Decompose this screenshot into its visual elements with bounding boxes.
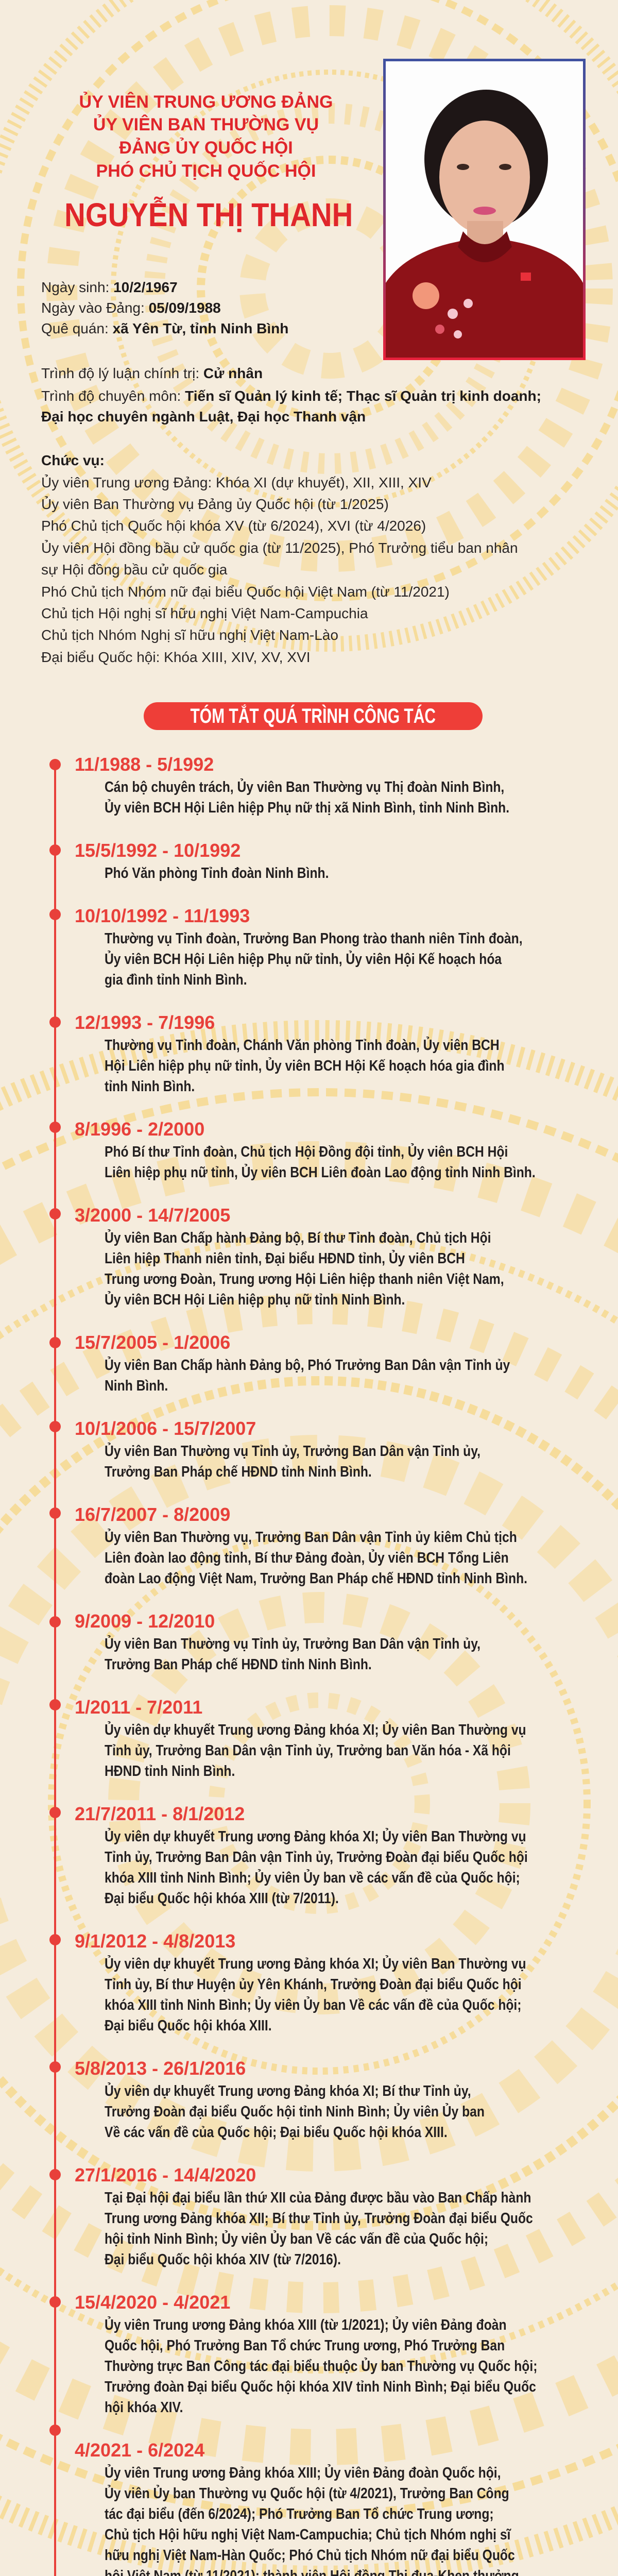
entry: 1/2011 - 7/2011: HĐND tỉnh Ninh Bình. bbox=[105, 1763, 235, 1780]
entry: 15/4/2020 - 4/2021: Quốc hội, Phó Trưởng Ban Tổ chức Trung ương, Phó Trưởng Ban bbox=[105, 2337, 505, 2354]
entry: 4/2021 - 6/2024: Chủ tịch Hội hữu nghị Việt Nam-Campuchia; Chủ tịch Nhóm nghị sĩ bbox=[105, 2527, 510, 2543]
entry: 15/7/2005 - 1/2006: 15/7/2005 - 1/2006 bbox=[75, 1332, 230, 1353]
entry: 15/4/2020 - 4/2021: Ủy viên Trung ương Đảng khóa XIII (từ 1/2021); Ủy viên Đảng đoàn bbox=[105, 2317, 507, 2333]
entry: 10/1/2006 - 15/7/2007: Ủy viên Ban Thường vụ Tỉnh ủy, Trưởng Ban Dân vận Tỉnh ủy, bbox=[105, 1443, 480, 1460]
entry: 3/2000 - 14/7/2005: Ủy viên BCH Hội Liên hiệp phụ nữ tỉnh Ninh Bình. bbox=[105, 1292, 405, 1308]
title: positions: ỦY VIÊN TRUNG ƯƠNG ĐẢNG bbox=[79, 92, 333, 112]
entry: 15/4/2020 - 4/2021 bbox=[75, 2292, 537, 2416]
entry: 10/10/1992 - 11/1993: gia đình tỉnh Ninh Bình. bbox=[105, 972, 247, 988]
title: positions: ĐẢNG ỦY QUỐC HỘI bbox=[119, 138, 293, 158]
personal info: Đại học chuyên ngành Luật, Đại học Thanh vận bbox=[41, 409, 366, 425]
portrait photo bbox=[383, 59, 586, 360]
entry: 3/2000 - 14/7/2005: Trung ương Đoàn, Trung ương Hội Liên hiệp thanh niên Việt Nam, bbox=[105, 1271, 504, 1287]
entry: 4/2021 - 6/2024: tác đại biểu (đến 6/2024); Phó Trưởng Ban Tổ chức Trung ương; bbox=[105, 2506, 494, 2522]
entry: 9/1/2012 - 4/8/2013: Đại biểu Quốc hội khóa XIII. bbox=[105, 2018, 272, 2034]
title: name: NGUYỄN THỊ THANH bbox=[64, 196, 353, 233]
entry: 10/1/2006 - 15/7/2007: Trưởng Ban Pháp chế HĐND tỉnh Ninh Bình. bbox=[105, 1464, 372, 1480]
personal info: Ngày vào Đảng: 05/09/1988 bbox=[41, 300, 221, 316]
personal info: Phó Chủ tịch Nhóm nữ đại biểu Quốc hội Việt Nam (từ 11/2021) bbox=[41, 584, 450, 600]
timeline dots bbox=[49, 759, 61, 2436]
section banner: TÓM TẮT QUÁ TRÌNH CÔNG TÁC bbox=[191, 705, 436, 727]
entry: 10/10/1992 - 11/1993: Ủy viên BCH Hội Liên hiệp Phụ nữ tỉnh, Ủy viên Hội Kế hoạch hóa bbox=[105, 951, 502, 968]
entry: 15/4/2020 - 4/2021: hội khóa XIV. bbox=[105, 2399, 183, 2416]
entry: 10/10/1992 - 11/1993 bbox=[75, 905, 523, 988]
entry: 10/10/1992 - 11/1993: Thường vụ Tỉnh đoàn, Trưởng Ban Phong trào thanh niên Tỉnh đoàn, bbox=[105, 930, 523, 947]
entry: 5/8/2013 - 26/1/2016: Trưởng Đoàn đại biểu Quốc hội tỉnh Ninh Bình; Ủy viên Ủy ban bbox=[105, 2104, 485, 2120]
entry: 11/1988 - 5/1992: Cán bộ chuyên trách, Ủy viên Ban Thường vụ Thị đoàn Ninh Bình, bbox=[105, 779, 504, 795]
personal info: Ủy viên Hội đồng bầu cử quốc gia (từ 11/2025), Phó Trưởng tiểu ban nhân bbox=[41, 540, 518, 556]
entry: 9/2009 - 12/2010 bbox=[75, 1611, 480, 1673]
timeline line bbox=[54, 765, 56, 2576]
personal info: Chủ tịch Hội nghị sĩ hữu nghị Việt Nam-Campuchia bbox=[41, 605, 368, 621]
entry: 16/7/2007 - 8/2009: Ủy viên Ban Thường vụ, Trưởng Ban Dân vận Tỉnh ủy kiêm Chủ tịch bbox=[105, 1529, 517, 1546]
personal info: Phó Chủ tịch Quốc hội khóa XV (từ 6/2024), XVI (từ 4/2026) bbox=[41, 518, 426, 534]
entry: 16/7/2007 - 8/2009: 16/7/2007 - 8/2009 bbox=[75, 1504, 230, 1525]
entry: 3/2000 - 14/7/2005: Liên hiệp Thanh niên tỉnh, Đại biểu HĐND tỉnh, Ủy viên BCH bbox=[105, 1250, 465, 1267]
personal info: sự Hội đồng bầu cử quốc gia bbox=[41, 562, 227, 578]
personal info: Chức vụ: bbox=[41, 452, 105, 468]
entry: 16/7/2007 - 8/2009: Liên đoàn lao động tỉnh, Bí thư Đảng đoàn, Ủy viên BCH Tổng Liên bbox=[105, 1550, 509, 1566]
entry: 8/1996 - 2/2000 bbox=[75, 1118, 536, 1181]
entry: 27/1/2016 - 14/4/2020: 27/1/2016 - 14/4/2020 bbox=[75, 2164, 256, 2185]
entry: 15/7/2005 - 1/2006: Ninh Bình. bbox=[105, 1378, 168, 1394]
entry: 16/7/2007 - 8/2009: đoàn Lao động Việt Nam, Trưởng Ban Pháp chế HĐND tỉnh Ninh Bình. bbox=[105, 1570, 527, 1587]
entry: 9/1/2012 - 4/8/2013 bbox=[75, 1930, 526, 2034]
entry: 11/1988 - 5/1992 bbox=[75, 754, 509, 816]
timeline entries bbox=[75, 754, 537, 2576]
entry: 15/5/1992 - 10/1992: Phó Văn phòng Tỉnh đoàn Ninh Bình. bbox=[105, 865, 329, 882]
entry: 21/7/2011 - 8/1/2012: Ủy viên dự khuyết Trung ương Đảng khóa XI; Ủy viên Ban Thường vụ bbox=[105, 1828, 526, 1845]
personal info: Ủy viên Trung ương Đảng: Khóa XI (dự khuyết), XII, XIII, XIV bbox=[41, 474, 432, 490]
entry: 9/1/2012 - 4/8/2013: khóa XIII tỉnh Ninh Bình; Ủy viên Ủy ban Về các vấn đề của Quốc hội; bbox=[105, 1997, 521, 2013]
entry: 15/5/1992 - 10/1992 bbox=[75, 840, 329, 882]
entry: 1/2011 - 7/2011: Tỉnh ủy, Trưởng Ban Dân vận Tỉnh ủy, Trưởng ban Văn hóa - Xã hội bbox=[105, 1742, 511, 1759]
entry: 4/2021 - 6/2024: Ủy viên Ủy ban Thường vụ Quốc hội (từ 4/2021), Trưởng Ban Công bbox=[105, 2485, 509, 2502]
entry: 11/1988 - 5/1992: 11/1988 - 5/1992 bbox=[75, 754, 214, 775]
title: positions: PHÓ CHỦ TỊCH QUỐC HỘI bbox=[96, 161, 316, 181]
entry: 1/2011 - 7/2011: 1/2011 - 7/2011 bbox=[75, 1697, 202, 1718]
entry: 15/5/1992 - 10/1992: 15/5/1992 - 10/1992 bbox=[75, 840, 241, 861]
entry: 21/7/2011 - 8/1/2012: Tỉnh ủy, Trưởng Ban Dân vận Tỉnh ủy, Trưởng Đoàn đại biểu Quốc hội bbox=[105, 1849, 528, 1866]
entry: 21/7/2011 - 8/1/2012: khóa XIII tỉnh Ninh Bình; Ủy viên Ủy ban về các vấn đề của Quốc hội; bbox=[105, 1870, 520, 1886]
personal info: Trình độ chuyên môn: Tiến sĩ Quản lý kinh tế; Thạc sĩ Quản trị kinh doanh; bbox=[41, 388, 541, 404]
entry: 12/1993 - 7/1996 bbox=[75, 1012, 505, 1095]
personal info: Ủy viên Ban Thường vụ Đảng ủy Quốc hội (từ 1/2025) bbox=[41, 496, 389, 512]
entry: 9/1/2012 - 4/8/2013: 9/1/2012 - 4/8/2013 bbox=[75, 1930, 235, 1952]
entry: 5/8/2013 - 26/1/2016: Về các vấn đề của Quốc hội; Đại biểu Quốc hội khóa XIII. bbox=[105, 2124, 448, 2141]
entry: 27/1/2016 - 14/4/2020 bbox=[75, 2164, 533, 2268]
entry: 8/1996 - 2/2000: Phó Bí thư Tỉnh đoàn, Chủ tịch Hội Đồng đội tỉnh, Ủy viên BCH Hội bbox=[105, 1144, 508, 1160]
title: positions: ỦY VIÊN BAN THƯỜNG VỤ bbox=[93, 115, 319, 134]
entry: 16/7/2007 - 8/2009 bbox=[75, 1504, 527, 1587]
entry: 3/2000 - 14/7/2005 bbox=[75, 1205, 504, 1308]
entry: 10/1/2006 - 15/7/2007: 10/1/2006 - 15/7/2007 bbox=[75, 1418, 256, 1439]
entry: 4/2021 - 6/2024: 4/2021 - 6/2024 bbox=[75, 2439, 204, 2461]
entry: 15/4/2020 - 4/2021: Trưởng đoàn Đại biểu Quốc hội khóa XIV tỉnh Ninh Bình; Đại biểu Quốc bbox=[105, 2379, 536, 2395]
personal info: Quê quán: xã Yên Từ, tỉnh Ninh Bình bbox=[41, 320, 288, 336]
entry: 1/2011 - 7/2011 bbox=[75, 1697, 526, 1780]
entry: 27/1/2016 - 14/4/2020: Trung ương Đảng khóa XII; Bí thư Tỉnh ủy, Trưởng Đoàn đại biểu Quốc bbox=[105, 2210, 533, 2227]
entry: 5/8/2013 - 26/1/2016: Ủy viên dự khuyết Trung ương Đảng khóa XI; Bí thư Tỉnh ủy, bbox=[105, 2083, 471, 2099]
entry: 27/1/2016 - 14/4/2020: hội tỉnh Ninh Bình; Ủy viên Ủy ban Về các vấn đề của Quốc hội; bbox=[105, 2231, 488, 2247]
entry: 9/2009 - 12/2010: Trưởng Ban Pháp chế HĐND tỉnh Ninh Bình. bbox=[105, 1656, 372, 1673]
section banner bbox=[144, 702, 483, 730]
entry: 4/2021 - 6/2024 bbox=[75, 2439, 519, 2576]
entry: 15/7/2005 - 1/2006: Ủy viên Ban Chấp hành Đảng bộ, Phó Trưởng Ban Dân vận Tỉnh ủy bbox=[105, 1357, 510, 1374]
entry: 15/7/2005 - 1/2006 bbox=[75, 1332, 510, 1394]
entry: 1/2011 - 7/2011: Ủy viên dự khuyết Trung ương Đảng khóa XI; Ủy viên Ban Thường vụ bbox=[105, 1722, 526, 1738]
entry: 3/2000 - 14/7/2005: Ủy viên Ban Chấp hành Đảng bộ, Bí thư Tỉnh đoàn, Chủ tịch Hội bbox=[105, 1230, 491, 1246]
entry: 10/10/1992 - 11/1993: 10/10/1992 - 11/1993 bbox=[75, 905, 250, 926]
entry: 9/1/2012 - 4/8/2013: Ủy viên dự khuyết Trung ương Đảng khóa XI; Ủy viên Ban Thường vụ bbox=[105, 1956, 526, 1972]
entry: 9/1/2012 - 4/8/2013: Tỉnh ủy, Bí thư Huyện ủy Yên Khánh, Trưởng Đoàn đại biểu Quốc hội bbox=[105, 1976, 522, 1993]
entry: 11/1988 - 5/1992: Ủy viên BCH Hội Liên hiệp Phụ nữ thị xã Ninh Bình, tỉnh Ninh Bình. bbox=[105, 800, 509, 816]
entry: 4/2021 - 6/2024: Ủy viên Trung ương Đảng khóa XIII; Ủy viên Đảng đoàn Quốc hội, bbox=[105, 2465, 501, 2481]
entry: 8/1996 - 2/2000: Liên hiệp phụ nữ tỉnh, Ủy viên BCH Liên đoàn Lao động tỉnh Ninh Bình. bbox=[105, 1164, 536, 1181]
personal info bbox=[41, 279, 541, 665]
personal info: Đại biểu Quốc hội: Khóa XIII, XIV, XV, XVI bbox=[41, 649, 310, 665]
entry: 3/2000 - 14/7/2005: 3/2000 - 14/7/2005 bbox=[75, 1205, 230, 1226]
personal info: Ngày sinh: 10/2/1967 bbox=[41, 279, 178, 295]
entry: 21/7/2011 - 8/1/2012: 21/7/2011 - 8/1/2012 bbox=[75, 1803, 245, 1824]
entry: 12/1993 - 7/1996: 12/1993 - 7/1996 bbox=[75, 1012, 215, 1033]
entry: 21/7/2011 - 8/1/2012: Đại biểu Quốc hội khóa XIII (từ 7/2011). bbox=[105, 1890, 339, 1907]
title: positions bbox=[79, 92, 333, 181]
entry: 4/2021 - 6/2024: hữu nghị Việt Nam-Hàn Quốc; Phó Chủ tịch Nhóm nữ đại biểu Quốc bbox=[105, 2547, 515, 2564]
entry: 21/7/2011 - 8/1/2012 bbox=[75, 1803, 528, 1907]
personal info: Chủ tịch Nhóm Nghị sĩ hữu nghị Việt Nam-Lào bbox=[41, 627, 338, 643]
entry: 5/8/2013 - 26/1/2016 bbox=[75, 2058, 485, 2141]
entry: 12/1993 - 7/1996: tỉnh Ninh Bình. bbox=[105, 1078, 195, 1095]
entry: 10/1/2006 - 15/7/2007 bbox=[75, 1418, 480, 1480]
entry: 12/1993 - 7/1996: Hội Liên hiệp phụ nữ tỉnh, Ủy viên BCH Hội Kế hoạch hóa gia đình bbox=[105, 1058, 505, 1074]
personal info: Trình độ lý luận chính trị: Cử nhân bbox=[41, 365, 263, 381]
entry: 27/1/2016 - 14/4/2020: Đại biểu Quốc hội khóa XIV (từ 7/2016). bbox=[105, 2251, 341, 2268]
entry: 5/8/2013 - 26/1/2016: 5/8/2013 - 26/1/2016 bbox=[75, 2058, 246, 2079]
entry: 27/1/2016 - 14/4/2020: Tại Đại hội đại biểu lần thứ XII của Đảng được bầu vào Ban Chấp hành bbox=[105, 2190, 531, 2206]
entry: 15/4/2020 - 4/2021: Thường trực Ban Công tác đại biểu thuộc Ủy ban Thường vụ Quốc hội; bbox=[105, 2358, 537, 2375]
entry: 8/1996 - 2/2000: 8/1996 - 2/2000 bbox=[75, 1118, 204, 1140]
entry: 15/4/2020 - 4/2021: 15/4/2020 - 4/2021 bbox=[75, 2292, 230, 2313]
entry: 12/1993 - 7/1996: Thường vụ Tỉnh đoàn, Chánh Văn phòng Tỉnh đoàn, Ủy viên BCH bbox=[105, 1037, 500, 1054]
entry: 9/2009 - 12/2010: 9/2009 - 12/2010 bbox=[75, 1611, 215, 1632]
entry: 9/2009 - 12/2010: Ủy viên Ban Thường vụ Tỉnh ủy, Trưởng Ban Dân vận Tỉnh ủy, bbox=[105, 1636, 480, 1652]
